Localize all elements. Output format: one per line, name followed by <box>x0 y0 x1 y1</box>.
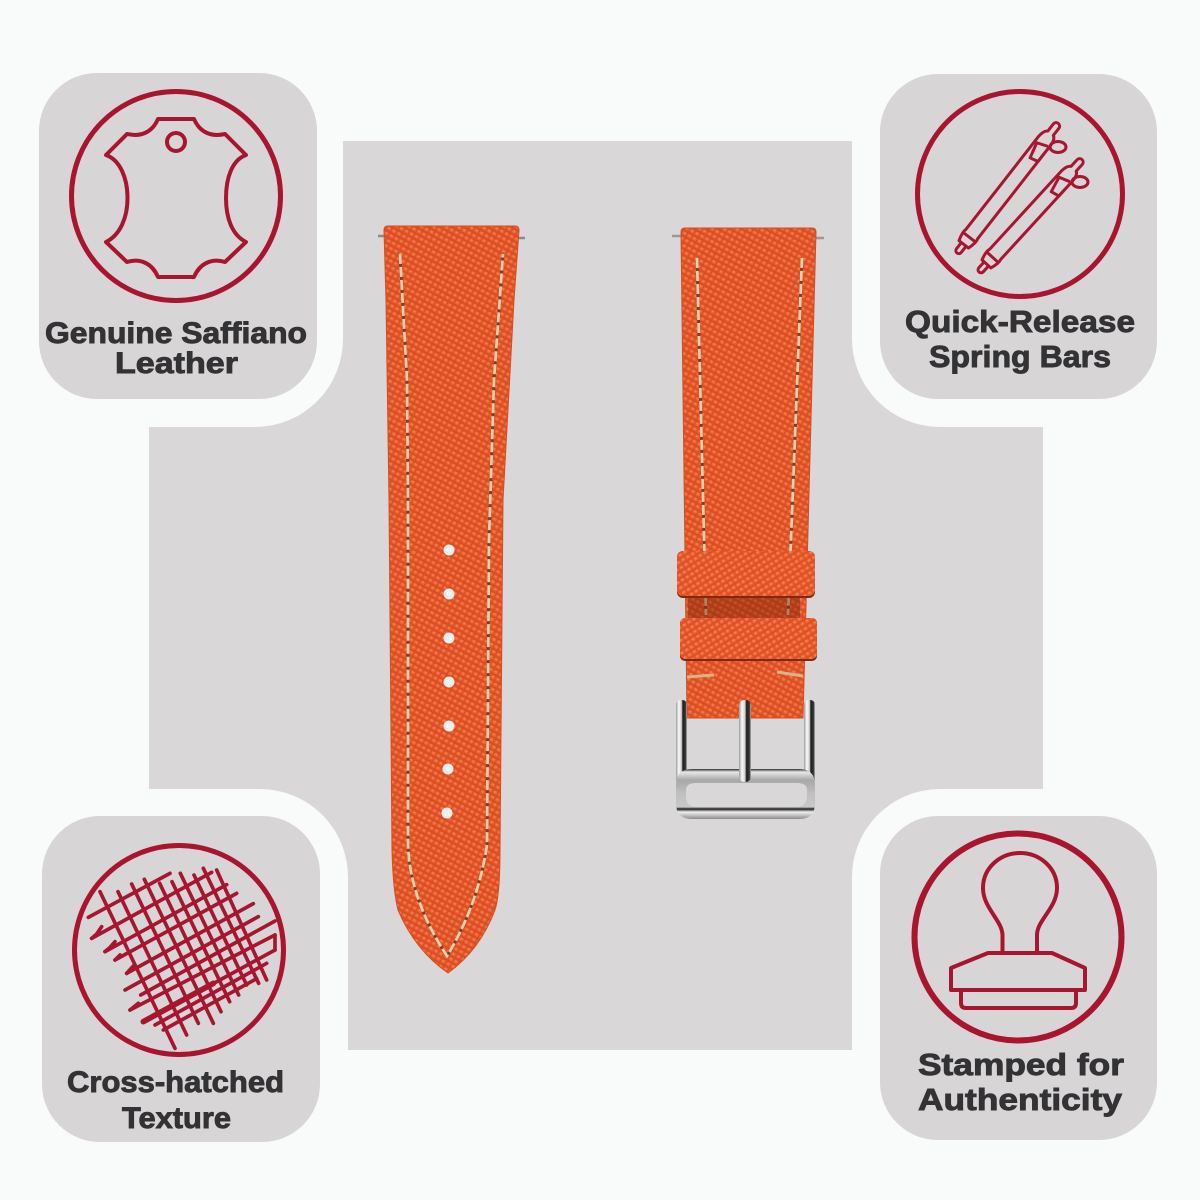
keeper loops <box>677 551 817 661</box>
spring bar pins <box>378 236 525 238</box>
heading: genuine saffiano leather <box>45 317 307 380</box>
panel: quick-release spring bars <box>852 47 1183 427</box>
gap shadow between keepers <box>688 596 800 620</box>
icon: spring bars <box>918 92 1122 296</box>
heading: stamped for authenticity: Stamped for <box>918 1047 1124 1082</box>
panel: stamped for authenticity <box>852 789 1183 1167</box>
heading: cross-hatched texture <box>67 1066 284 1135</box>
short strap body <box>681 228 816 718</box>
icon: leather hide <box>72 92 280 300</box>
heading: stamped for authenticity <box>918 1047 1124 1117</box>
long strap piece with holes <box>378 226 525 973</box>
icon: cross-hatch <box>74 846 284 1054</box>
stitching <box>400 254 503 956</box>
long strap body <box>384 226 519 973</box>
spring bar pins <box>672 236 824 238</box>
heading: stamped for authenticity: Authenticity <box>918 1082 1123 1117</box>
panel: genuine saffiano leather <box>13 47 343 427</box>
central grey backdrop <box>149 141 1043 1050</box>
heading: quick-release spring bars: Quick-Release <box>905 304 1135 339</box>
heading: quick-release spring bars <box>905 304 1135 374</box>
heading: cross-hatched texture: Cross-hatched <box>67 1066 284 1099</box>
strap holes <box>442 544 454 818</box>
heading: genuine saffiano leather: Genuine Saffiano <box>45 317 307 350</box>
buckle <box>676 700 815 819</box>
heading: quick-release spring bars: Spring Bars <box>929 339 1111 374</box>
heading: genuine saffiano leather: Leather <box>115 347 238 380</box>
stitching <box>687 258 803 677</box>
icon: stamp <box>914 834 1122 1040</box>
heading: cross-hatched texture: Texture <box>122 1102 231 1135</box>
panel: cross-hatched texture <box>16 789 348 1169</box>
short strap piece with keepers and buckle <box>672 228 824 819</box>
